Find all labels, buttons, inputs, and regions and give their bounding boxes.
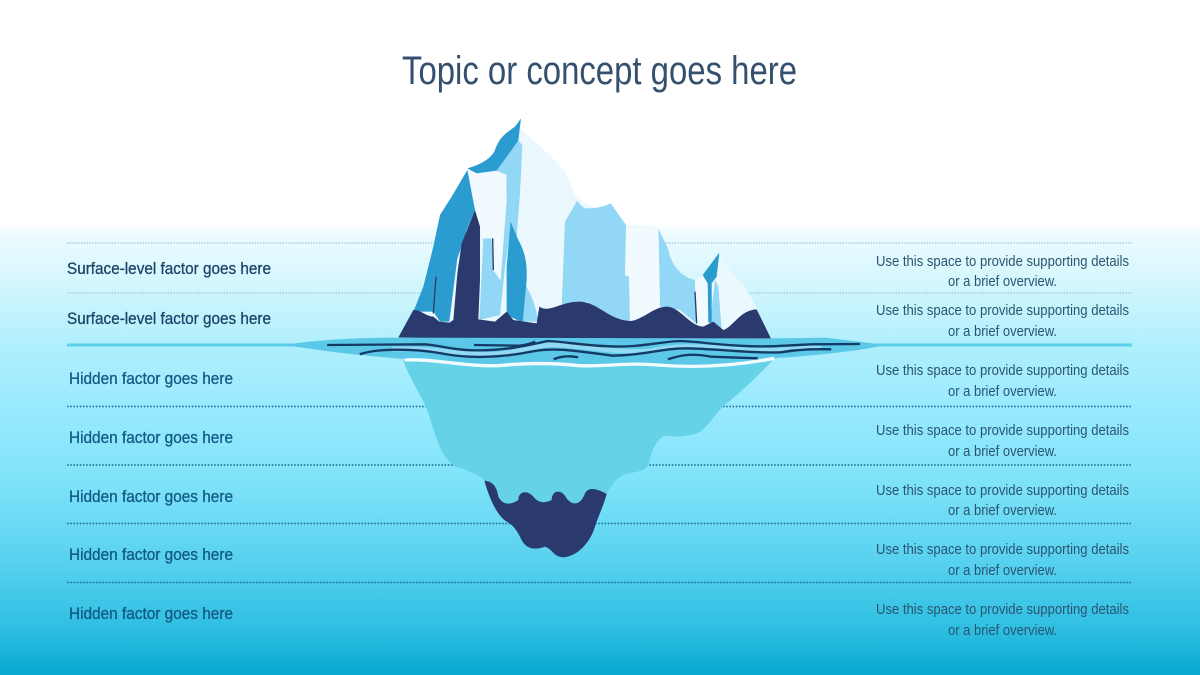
light ice base bbox=[413, 128, 758, 330]
iceberg: above-water peak bbox=[398, 118, 772, 343]
navy base and shadows bbox=[398, 210, 772, 343]
left labels: surface factors bbox=[67, 259, 271, 328]
iceberg: submerged mass bbox=[403, 359, 773, 513]
right column: supporting details: Use this space to provide supporting details bbox=[876, 253, 1129, 270]
left labels: hidden factors bbox=[69, 369, 233, 623]
right column: supporting details: or a brief overview. bbox=[948, 502, 1057, 519]
right column: supporting details: Use this space to provide supporting details bbox=[876, 422, 1129, 439]
left labels: hidden factors: Hidden factor goes here bbox=[69, 428, 233, 447]
left labels: hidden factors: Hidden factor goes here bbox=[69, 545, 233, 564]
right column: supporting details: or a brief overview. bbox=[948, 323, 1057, 340]
water surface band bbox=[284, 338, 886, 366]
right column: supporting details: or a brief overview. bbox=[948, 383, 1057, 400]
lighter wave bands bbox=[392, 345, 821, 354]
right column: supporting details: or a brief overview. bbox=[948, 273, 1057, 290]
white waterline bbox=[405, 358, 774, 366]
right column: supporting details: Use this space to provide supporting details bbox=[876, 362, 1129, 379]
right column: supporting details bbox=[876, 253, 1129, 639]
right column: supporting details: or a brief overview. bbox=[948, 622, 1057, 639]
white ice facets bbox=[469, 172, 708, 324]
title: Topic or concept goes here bbox=[402, 49, 797, 93]
blue shadow facets bbox=[413, 118, 719, 323]
mid-blue ice facets bbox=[479, 141, 722, 329]
left labels: surface factors: Surface-level factor goes here bbox=[67, 259, 271, 278]
left labels: surface factors: Surface-level factor goes here bbox=[67, 309, 271, 328]
right column: supporting details: Use this space to provide supporting details bbox=[876, 541, 1129, 558]
left labels: hidden factors: Hidden factor goes here bbox=[69, 487, 233, 506]
dark wave lines bbox=[327, 341, 860, 350]
right column: supporting details: Use this space to provide supporting details bbox=[876, 302, 1129, 319]
right column: supporting details: Use this space to provide supporting details bbox=[876, 482, 1129, 499]
left labels: hidden factors: Hidden factor goes here bbox=[69, 369, 233, 388]
right column: supporting details: Use this space to provide supporting details bbox=[876, 601, 1129, 618]
iceberg: deep navy base bbox=[484, 481, 607, 557]
right column: supporting details: or a brief overview. bbox=[948, 443, 1057, 460]
left labels: hidden factors: Hidden factor goes here bbox=[69, 604, 233, 623]
right column: supporting details: or a brief overview. bbox=[948, 562, 1057, 579]
divider lines bbox=[67, 243, 1132, 582]
